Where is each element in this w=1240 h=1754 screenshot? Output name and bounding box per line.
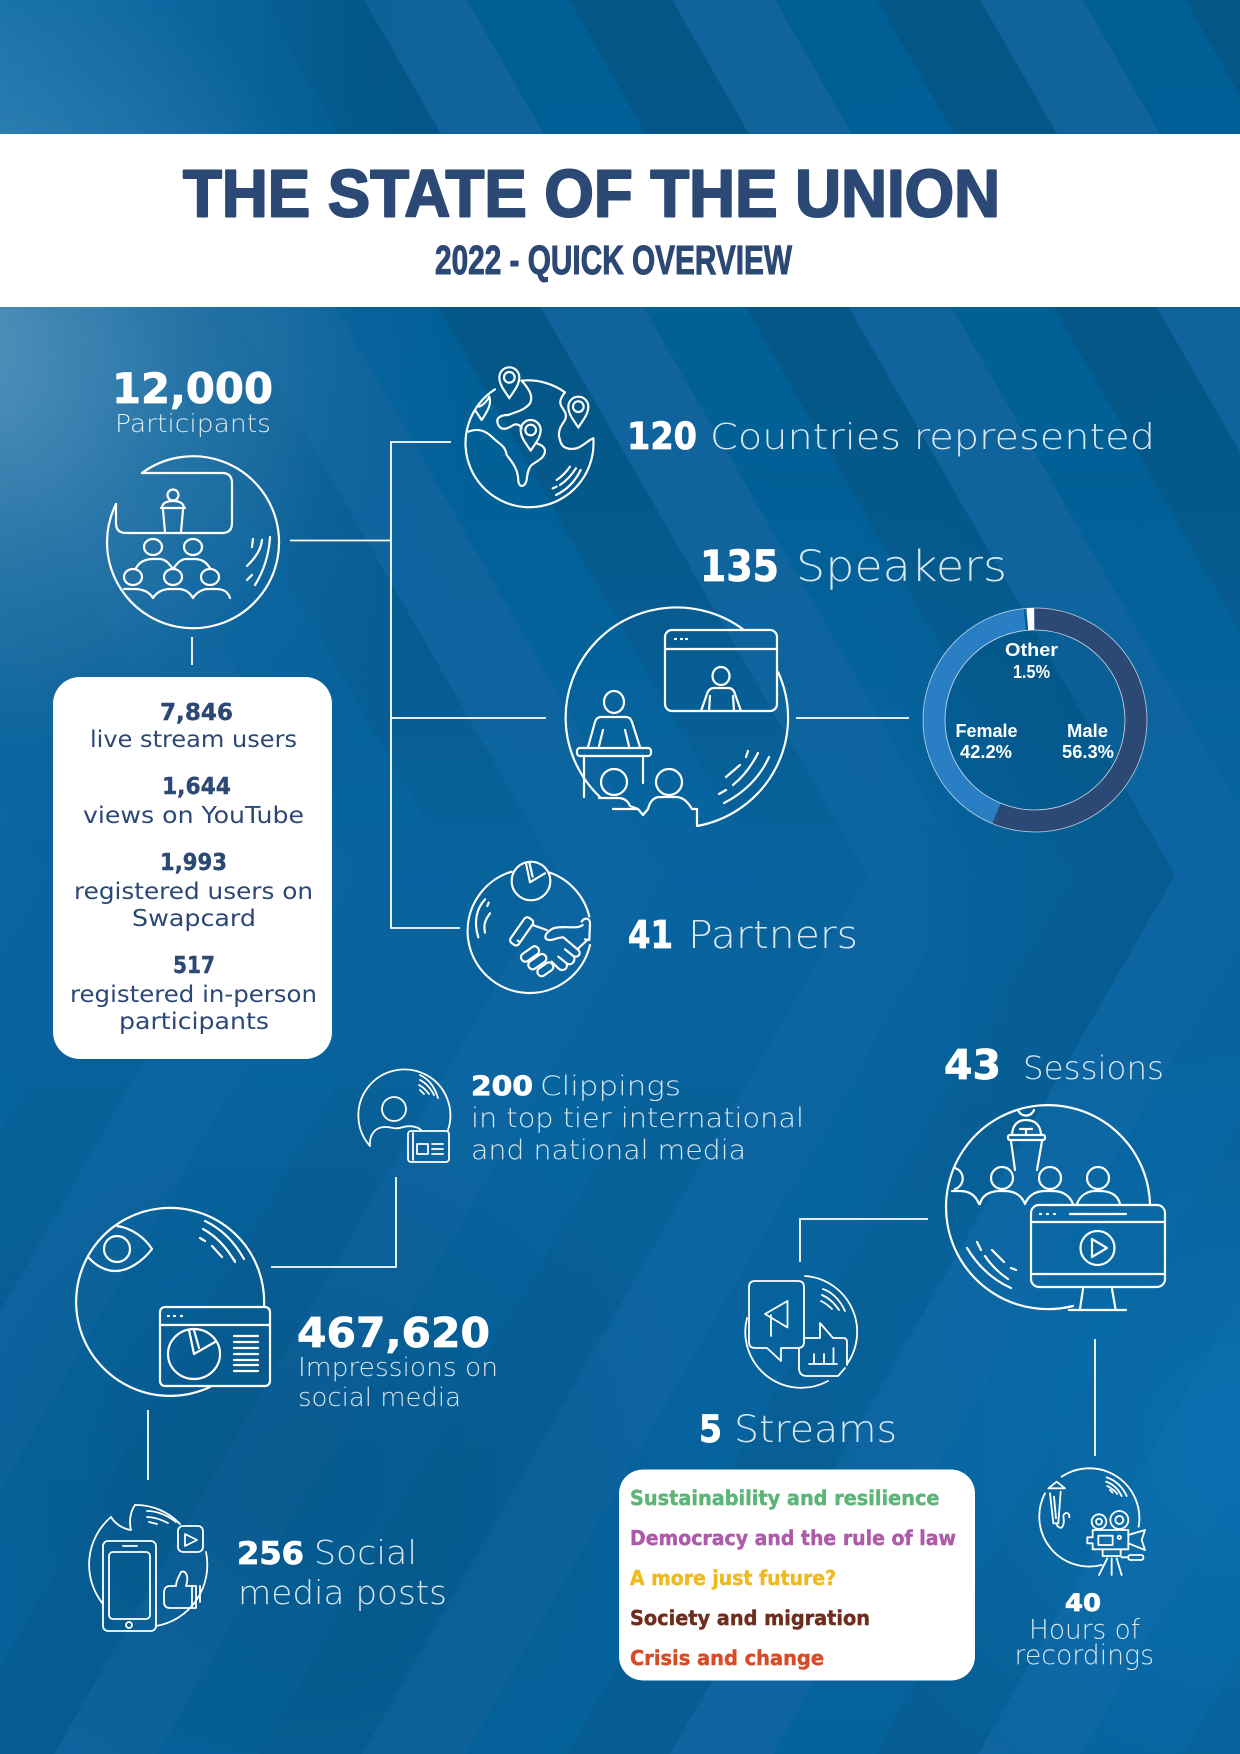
icon: streams speech bubbles (745, 1276, 857, 1388)
panel: participant breakdown: registered users on (74, 879, 313, 905)
panel: participant breakdown: 517 (173, 953, 215, 979)
recordings label: Hours of (1029, 1614, 1140, 1646)
clippings label: Clippings (540, 1071, 681, 1102)
donut chart: speakers by gender (923, 608, 1147, 832)
streams label: 5 (699, 1408, 722, 1451)
impressions label: social media (298, 1383, 461, 1413)
panel: participant breakdown (53, 677, 332, 1059)
panel: participant breakdown: 7,846 (160, 700, 233, 726)
panel: participant breakdown: live stream users (90, 727, 297, 753)
icon: clippings newspaper (358, 1069, 450, 1162)
recordings label: 40 (1065, 1589, 1101, 1617)
social posts label: 256 (237, 1536, 304, 1572)
clippings label: 200 (471, 1071, 533, 1102)
clippings label: in top tier international (471, 1103, 804, 1134)
icon: sessions (946, 1105, 1165, 1310)
title: THE STATE OF THE UNION (183, 156, 1000, 232)
donut chart: speakers by gender: 42.2% (960, 742, 1012, 762)
donut chart: speakers by gender: Male (1067, 721, 1108, 741)
clippings label (471, 1071, 804, 1166)
panel: streams list: Crisis and change (630, 1646, 824, 1670)
panel: participant breakdown: participants (119, 1009, 269, 1035)
connector lines: participants tree (192, 442, 909, 928)
icon: impressions eye and chart (76, 1208, 270, 1396)
participants count: 12,000 (112, 364, 273, 413)
social posts label: Social (314, 1533, 417, 1572)
icon: recordings microphone and camera (1039, 1468, 1145, 1575)
social posts label: media posts (238, 1573, 447, 1612)
sessions label: Sessions (1023, 1049, 1164, 1087)
icon: partners handshake (468, 862, 590, 993)
impressions label: Impressions on (298, 1353, 498, 1383)
panel: streams list: Sustainability and resilience (630, 1486, 940, 1510)
panel: participant breakdown: 1,993 (160, 850, 227, 876)
partners label: 41 (628, 913, 673, 957)
panel: streams list (619, 1470, 975, 1680)
panel: participant breakdown: 1,644 (162, 774, 231, 800)
header banner (0, 134, 1240, 307)
sessions label: 43 (944, 1041, 1001, 1089)
partners label (628, 913, 858, 957)
subtitle: 2022 - QUICK OVERVIEW (435, 237, 792, 283)
panel: participant breakdown: registered in-person (70, 982, 317, 1008)
sessions label (944, 1041, 1164, 1089)
speakers label: 135 (700, 542, 779, 592)
countries label: 120 (627, 415, 697, 458)
icon: speakers (566, 607, 788, 826)
recordings label: recordings (1014, 1640, 1154, 1671)
speakers label: Speakers (796, 542, 1007, 592)
partners label: Partners (688, 913, 858, 957)
panel: streams list: A more just future? (630, 1566, 836, 1590)
impressions label: 467,620 (297, 1309, 490, 1357)
donut chart: speakers by gender: Other (1005, 640, 1058, 660)
panel: participant breakdown: Swapcard (132, 906, 256, 932)
countries label: Countries represented (710, 417, 1155, 458)
recordings label (1014, 1589, 1154, 1671)
donut chart: speakers by gender: 56.3% (1062, 742, 1114, 762)
panel: participant breakdown: views on YouTube (83, 803, 304, 829)
connector lines: media (148, 1177, 1095, 1480)
donut chart: speakers by gender: 1.5% (1013, 662, 1050, 682)
icon: participants audience (107, 456, 279, 628)
participants count (112, 364, 273, 438)
streams label: Streams (734, 1408, 897, 1451)
speakers label (700, 542, 1007, 592)
icon: social media phone (89, 1505, 207, 1631)
panel: streams list: Democracy and the rule of law (630, 1526, 956, 1550)
impressions label (297, 1309, 498, 1413)
clippings label: and national media (471, 1135, 746, 1166)
icon: globe with pins (466, 367, 594, 507)
social posts label (237, 1533, 447, 1612)
panel: streams list: Society and migration (630, 1606, 870, 1630)
donut chart: speakers by gender: Female (956, 721, 1018, 741)
participants count: Participants (115, 409, 271, 438)
